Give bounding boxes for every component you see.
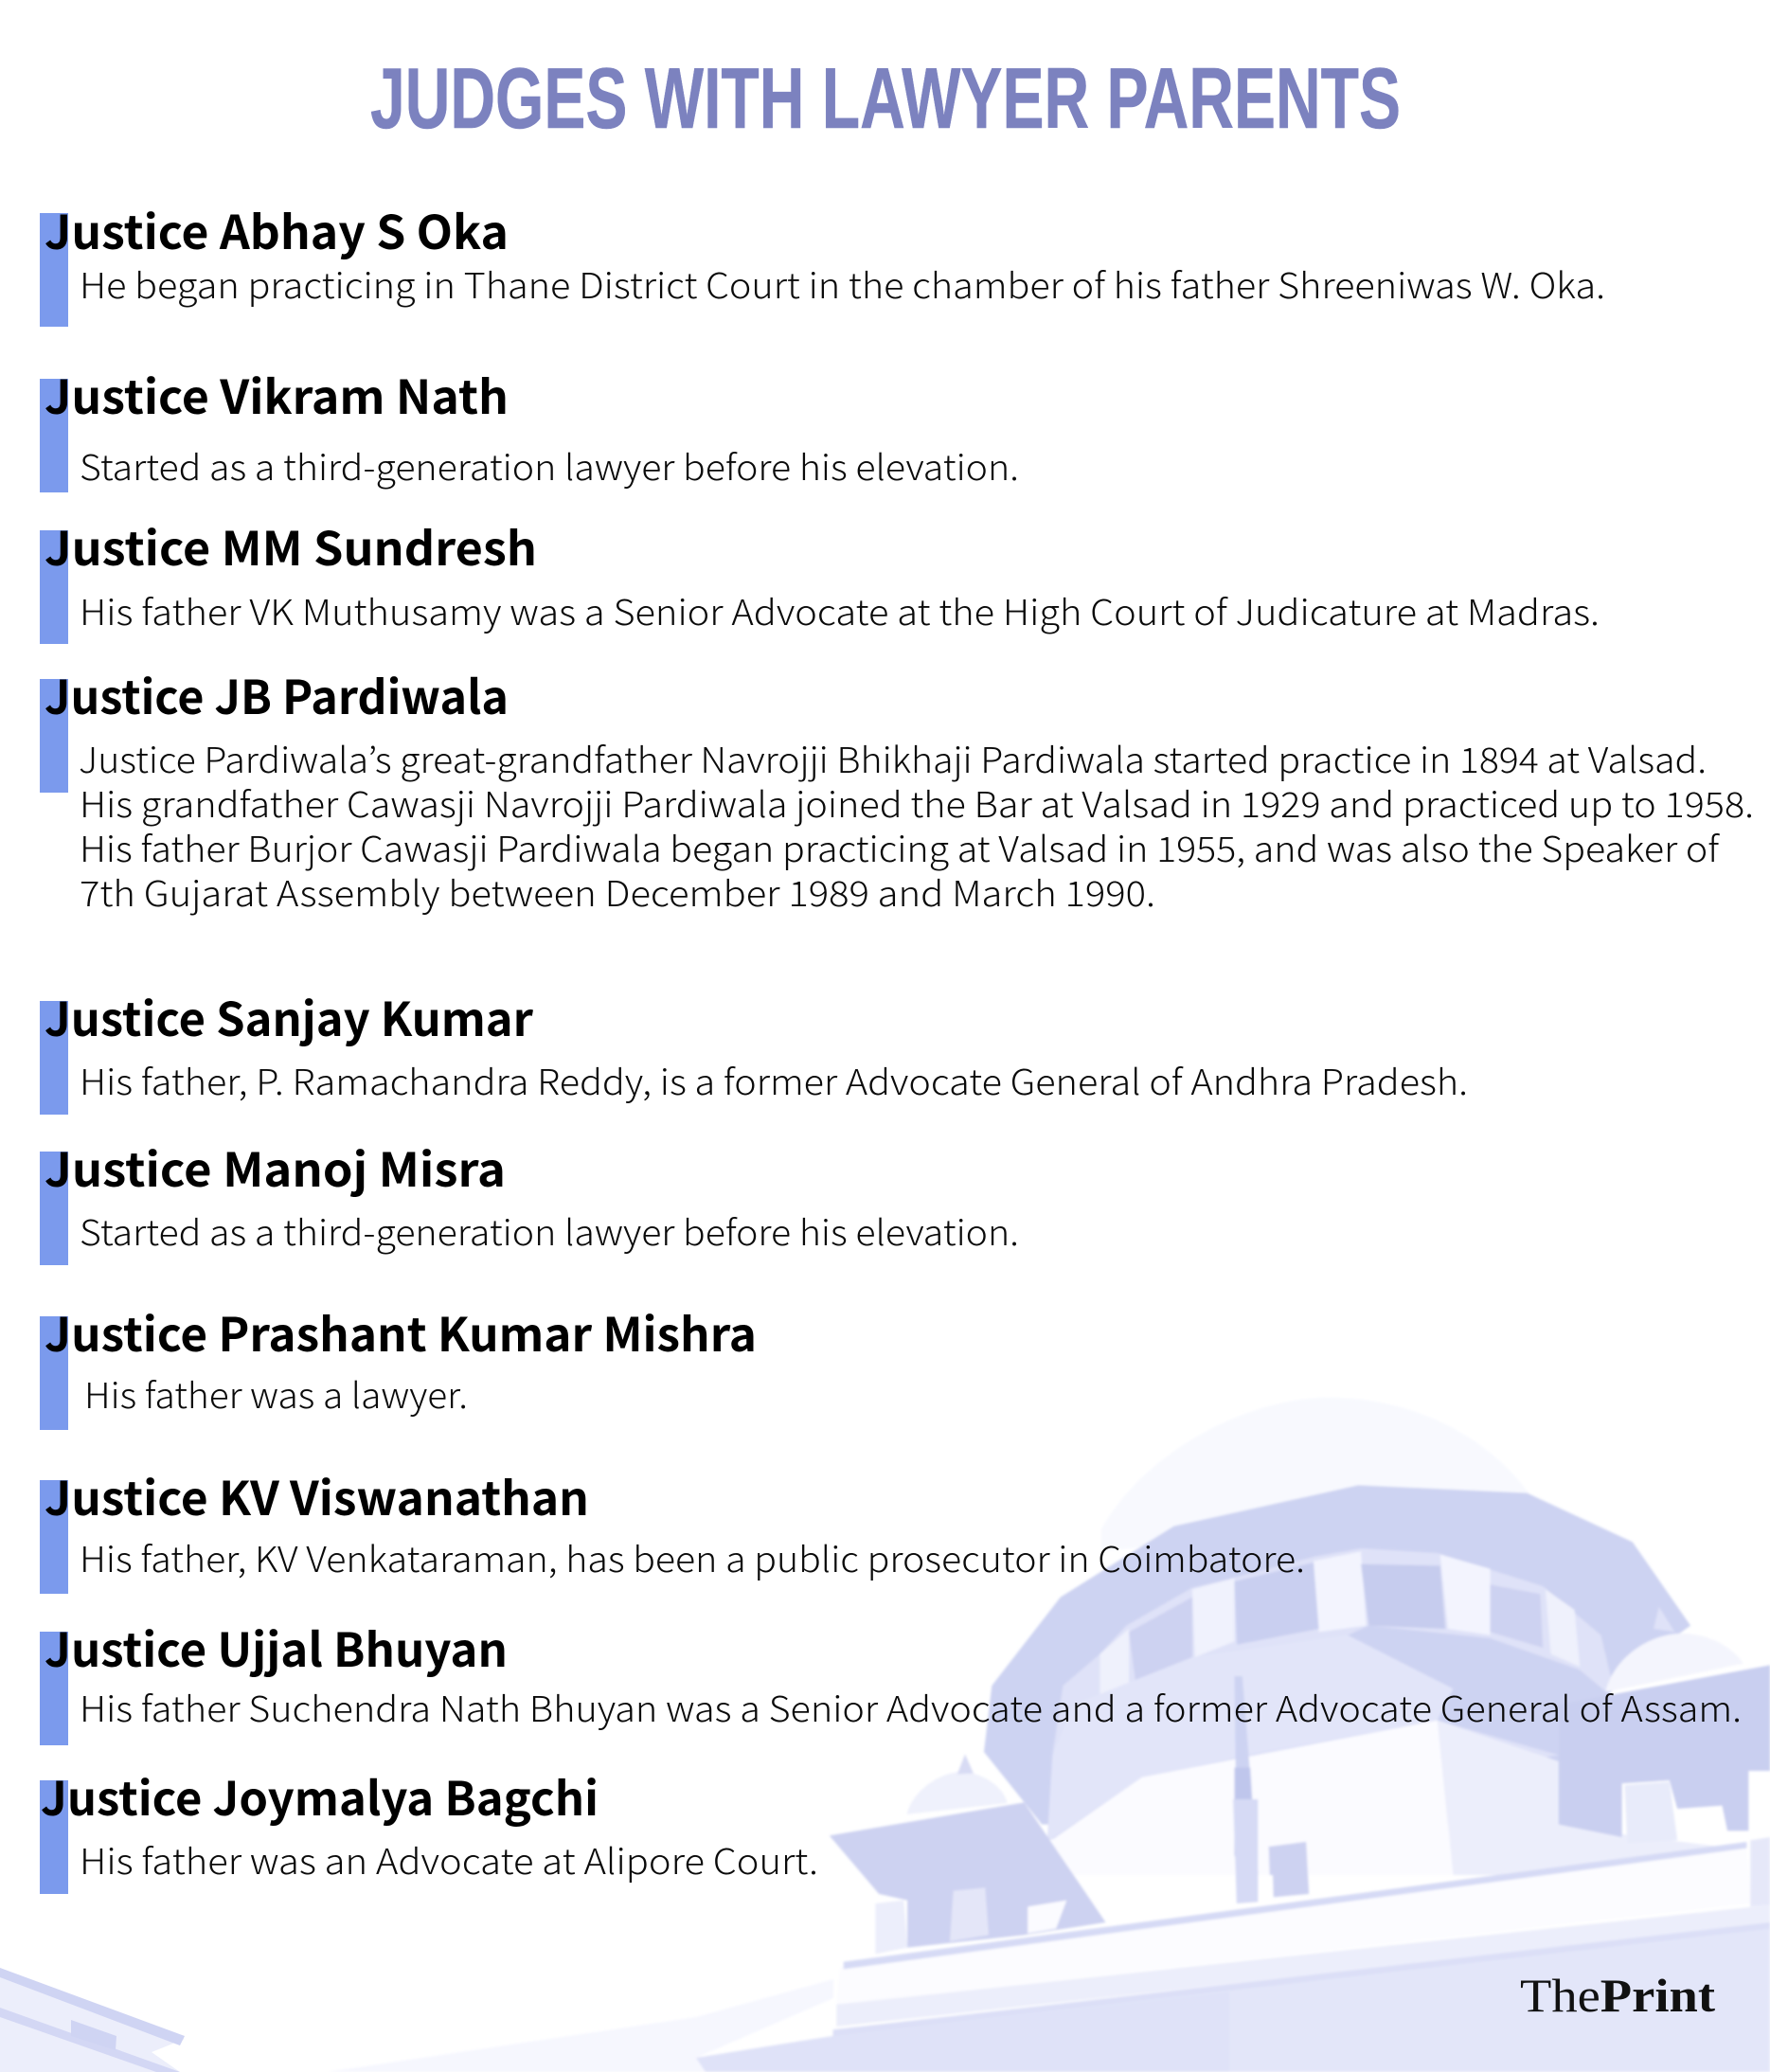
name: Justice KV Viswanathan <box>45 1462 589 1529</box>
accent bar <box>40 1001 68 1115</box>
accent bar <box>40 1480 68 1594</box>
name: Justice Vikram Nath <box>45 361 509 428</box>
description: His father VK Muthusamy was a Senior Advocate at the High Court of Judicature at Madras. <box>80 584 1600 635</box>
accent bar <box>40 379 68 492</box>
entry: Justice Joymalya Bagchi <box>40 1762 818 1894</box>
name: Justice Abhay S Oka <box>45 196 509 263</box>
accent bar <box>40 530 68 644</box>
description: His father, P. Ramachandra Reddy, is a former Advocate General of Andhra Pradesh. <box>80 1054 1468 1105</box>
entry: Justice KV Viswanathan <box>40 1462 1305 1594</box>
description <box>79 732 1754 917</box>
description: His father Burjor Cawasji Pardiwala began practicing at Valsad in 1955, and was also the Speaker of <box>80 821 1721 872</box>
title: JUDGES WITH LAWYER PARENTS <box>370 51 1401 147</box>
entry: Justice Ujjal Bhuyan <box>40 1614 1742 1745</box>
name: Justice Sanjay Kumar <box>45 983 534 1050</box>
description: Justice Pardiwala’s great-grandfather Navrojji Bhikhaji Pardiwala started practice in 1894 at Valsad. <box>79 732 1707 783</box>
background image: Supreme Court building <box>327 1398 1770 2072</box>
accent bar <box>40 679 68 793</box>
name: Justice Ujjal Bhuyan <box>45 1614 508 1681</box>
entry: Justice MM Sundresh <box>40 512 1600 644</box>
description: His grandfather Cawasji Navrojji Pardiwala joined the Bar at Valsad in 1929 and practiced up to 1958. <box>80 777 1754 828</box>
background image: lower left cornice <box>0 1968 185 2072</box>
name: Justice Manoj Misra <box>45 1134 506 1201</box>
description: Started as a third-generation lawyer before his elevation. <box>80 1205 1019 1256</box>
description: His father was a lawyer. <box>84 1367 468 1419</box>
name: Justice Joymalya Bagchi <box>41 1762 599 1830</box>
entry: Justice Sanjay Kumar <box>40 983 1468 1115</box>
description: He began practicing in Thane District Court in the chamber of his father Shreeniwas W. Oka. <box>80 258 1605 309</box>
accent bar <box>40 1780 68 1894</box>
accent bar <box>40 1152 68 1265</box>
description: Started as a third-generation lawyer before his elevation. <box>80 439 1019 491</box>
name: Justice Prashant Kumar Mishra <box>45 1298 757 1366</box>
description: 7th Gujarat Assembly between December 1989 and March 1990. <box>80 866 1155 917</box>
accent bar <box>40 213 68 327</box>
description: His father Suchendra Nath Bhuyan was a Senior Advocate and a former Advocate General of Assam. <box>80 1681 1742 1732</box>
name: Justice JB Pardiwala <box>45 661 509 728</box>
name: Justice MM Sundresh <box>45 512 537 580</box>
accent bar <box>40 1316 68 1430</box>
description: His father was an Advocate at Alipore Court. <box>80 1833 818 1884</box>
entry: Justice JB Pardiwala <box>40 661 1754 917</box>
logo: ThePrint: ThePrint <box>1520 1969 1715 2022</box>
accent bar <box>40 1632 68 1745</box>
entry: Justice Vikram Nath <box>40 361 1019 492</box>
entry: Justice Abhay S Oka <box>40 196 1605 327</box>
entry: Justice Manoj Misra <box>40 1134 1019 1265</box>
description: His father, KV Venkataraman, has been a public prosecutor in Coimbatore. <box>80 1531 1305 1582</box>
entry: Justice Prashant Kumar Mishra <box>40 1298 757 1430</box>
